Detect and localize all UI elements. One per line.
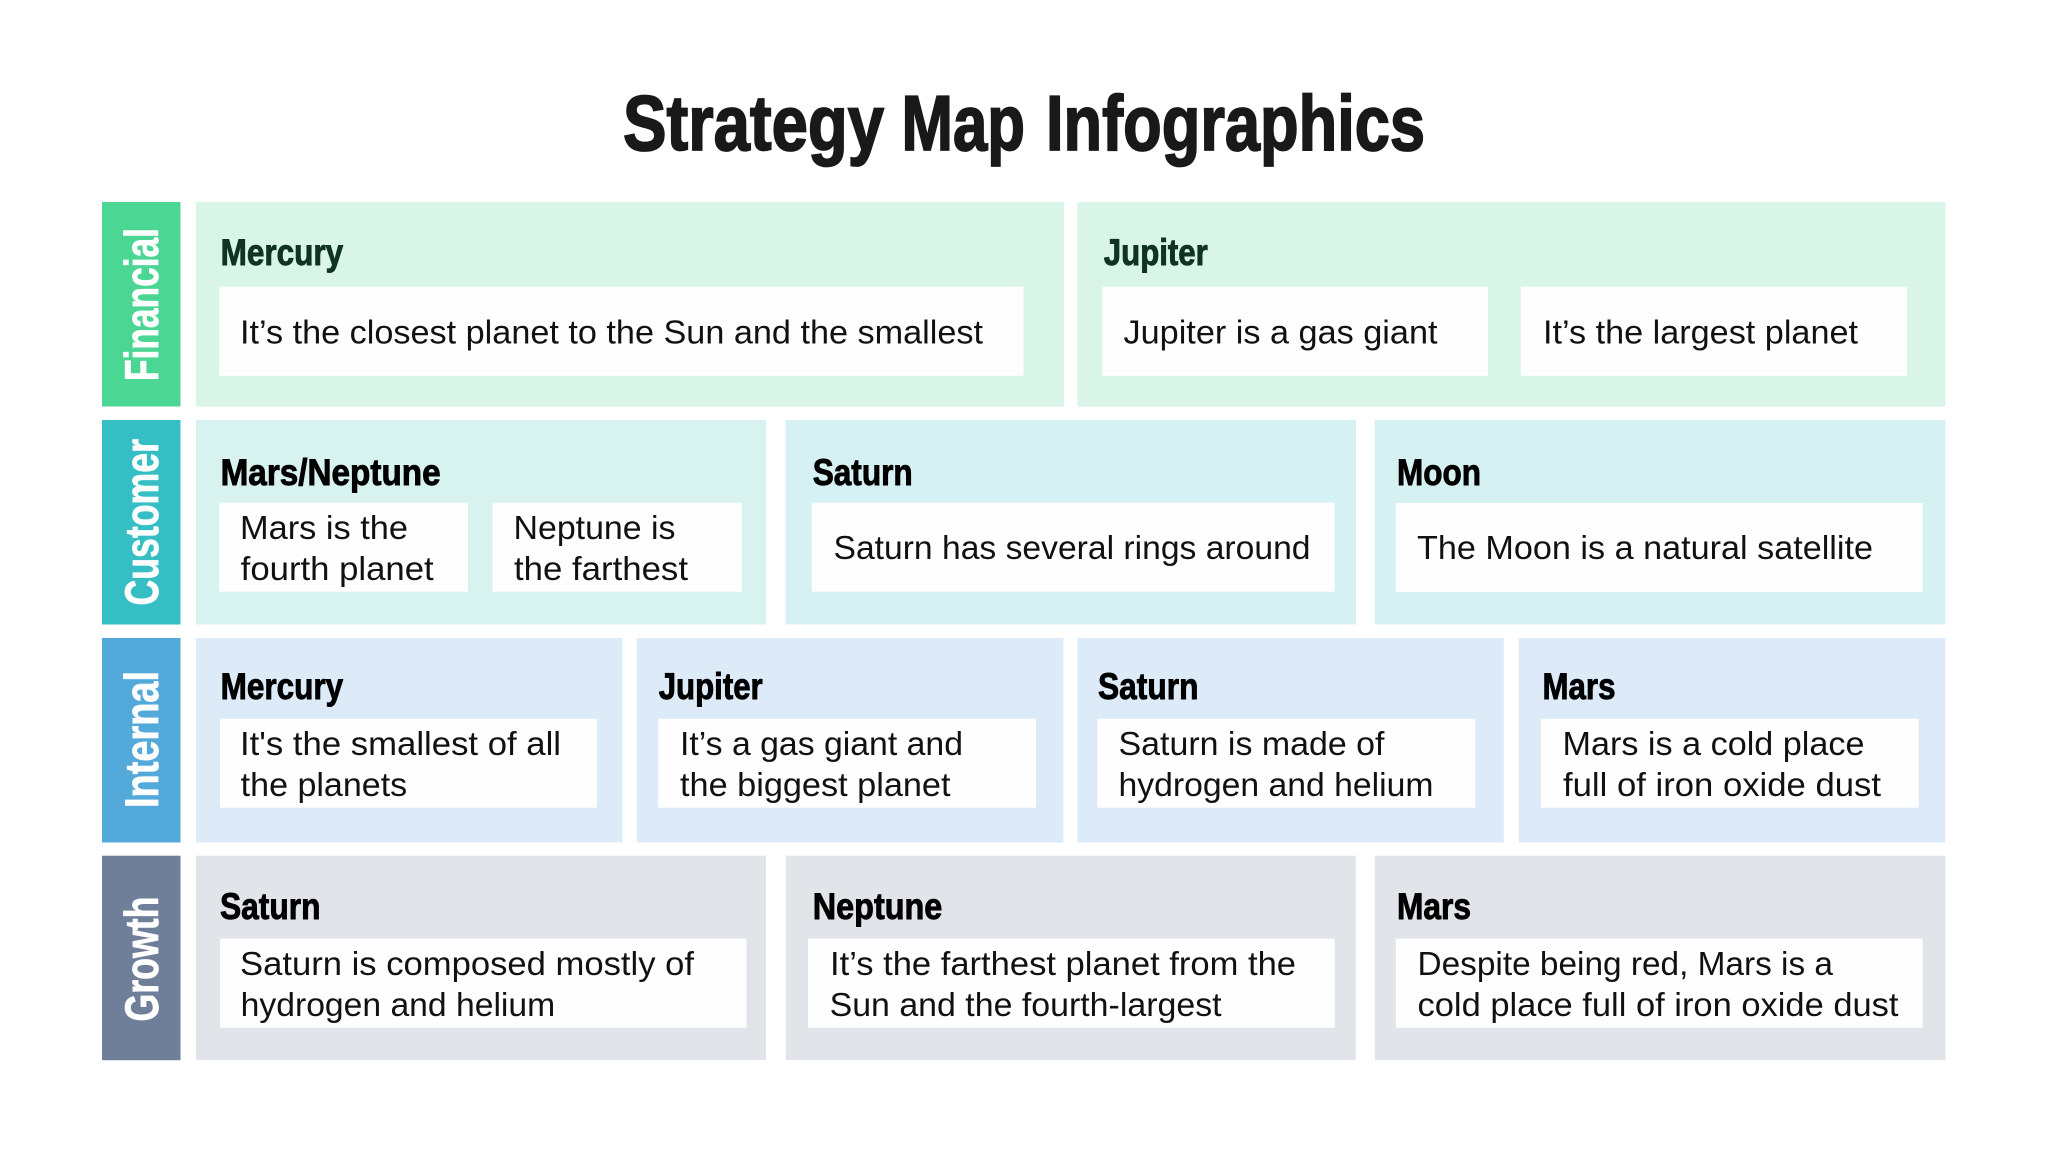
panel: Financial Jupiter: [1077, 202, 1945, 406]
text box: Neptune: It’s the farthest planet from the: [830, 946, 1296, 983]
panel: Internal Mars: [1519, 638, 1945, 842]
text box: Jupiter: It’s a gas giant and: [680, 726, 963, 763]
text box: Jupiter gas giant: Jupiter is a gas giant: [1124, 314, 1438, 352]
panel: Customer Mars/Neptune: [196, 420, 766, 624]
text box: Saturn: Saturn is made of: [1118, 726, 1385, 763]
text box: Saturn: hydrogen and helium: [241, 987, 555, 1024]
text box: Jupiter gas giant: [1102, 287, 1488, 376]
text box: Saturn: [1097, 719, 1475, 808]
text box: Mercury: the planets: [241, 767, 407, 804]
panel: Growth Neptune: [786, 856, 1356, 1060]
text box: Mars: [1541, 719, 1919, 808]
text box: Jupiter largest planet: [1521, 287, 1907, 376]
text box: Neptune: [808, 939, 1335, 1028]
row label: Internal: [102, 638, 180, 842]
panel: Internal Jupiter: [637, 638, 1063, 842]
heading: Mercury: Mercury: [221, 232, 343, 273]
heading: Neptune: Neptune: [813, 886, 942, 927]
row label: Customer: [102, 420, 180, 624]
text box: Neptune: the farthest: [514, 551, 689, 588]
title: Strategy: [623, 79, 884, 167]
text box: Neptune: Sun and the fourth-largest: [830, 987, 1222, 1024]
panel: Growth Saturn: [196, 856, 766, 1060]
text box: Moon: The Moon is a natural satellite: [1417, 530, 1873, 567]
panel: Customer Moon: [1375, 420, 1945, 624]
heading: Saturn: Saturn: [1098, 666, 1198, 707]
text box: Mercury: [220, 719, 597, 808]
text box: Moon: [1396, 503, 1923, 592]
text box: Mercury: It’s the closest planet to the Sun and the smallest: [240, 314, 984, 352]
row label: Internal: Internal: [115, 671, 168, 808]
text box: Mercury: It's the smallest of all: [240, 726, 561, 763]
heading: Mars/Neptune: Mars/Neptune: [221, 452, 441, 493]
text box: Mars: Despite being red, Mars is a: [1418, 946, 1833, 983]
text box: Jupiter: [658, 719, 1036, 808]
heading: Jupiter: Jupiter: [659, 666, 763, 707]
text box: Saturn: hydrogen and helium: [1118, 767, 1434, 804]
text box: Jupiter: the biggest planet: [680, 767, 951, 804]
heading: Saturn: Saturn: [813, 452, 913, 493]
heading: Mars: Mars: [1542, 666, 1616, 707]
heading: Jupiter: Jupiter: [1104, 232, 1208, 273]
row label: Growth: [102, 856, 180, 1060]
text box: Neptune: Neptune is: [514, 510, 676, 547]
text box: Jupiter largest planet: It’s the largest planet: [1543, 314, 1859, 352]
panel: Internal Saturn: [1078, 638, 1504, 842]
row label: Financial: [102, 202, 180, 406]
row label: Customer: Customer: [115, 439, 168, 606]
title: Infographics: [1046, 79, 1425, 167]
text box: Saturn: [812, 503, 1334, 592]
heading: Mercury: Mercury: [221, 666, 343, 707]
title: Map: [902, 79, 1025, 167]
panel: Financial Mercury: [196, 202, 1064, 406]
heading: Mars: Mars: [1397, 886, 1471, 927]
text box: Mars: [1396, 939, 1923, 1028]
heading: Moon: Moon: [1397, 452, 1481, 493]
text box: Saturn: Saturn has several rings around: [834, 530, 1310, 567]
row label: Growth: Growth: [115, 897, 168, 1022]
text box: Mars: fourth planet: [241, 551, 434, 588]
text box: Saturn: [220, 939, 746, 1028]
text box: Mars: full of iron oxide dust: [1563, 767, 1882, 804]
text box: Saturn: Saturn is composed mostly of: [240, 946, 695, 983]
heading: Saturn: Saturn: [220, 886, 320, 927]
title: [623, 79, 1425, 167]
row label: Financial: Financial: [115, 228, 168, 381]
text box: Mars: Mars is a cold place: [1562, 726, 1864, 763]
text box: Mercury: [219, 287, 1024, 376]
text box: Mars: Mars is the: [240, 510, 408, 547]
text box: Mars: [219, 503, 468, 592]
text box: Mars: cold place full of iron oxide dust: [1418, 987, 1899, 1024]
panel: Customer Saturn: [785, 420, 1356, 624]
panel: Internal Mercury: [196, 638, 622, 842]
text box: Neptune: [492, 503, 742, 592]
panel: Growth Mars: [1375, 856, 1945, 1060]
